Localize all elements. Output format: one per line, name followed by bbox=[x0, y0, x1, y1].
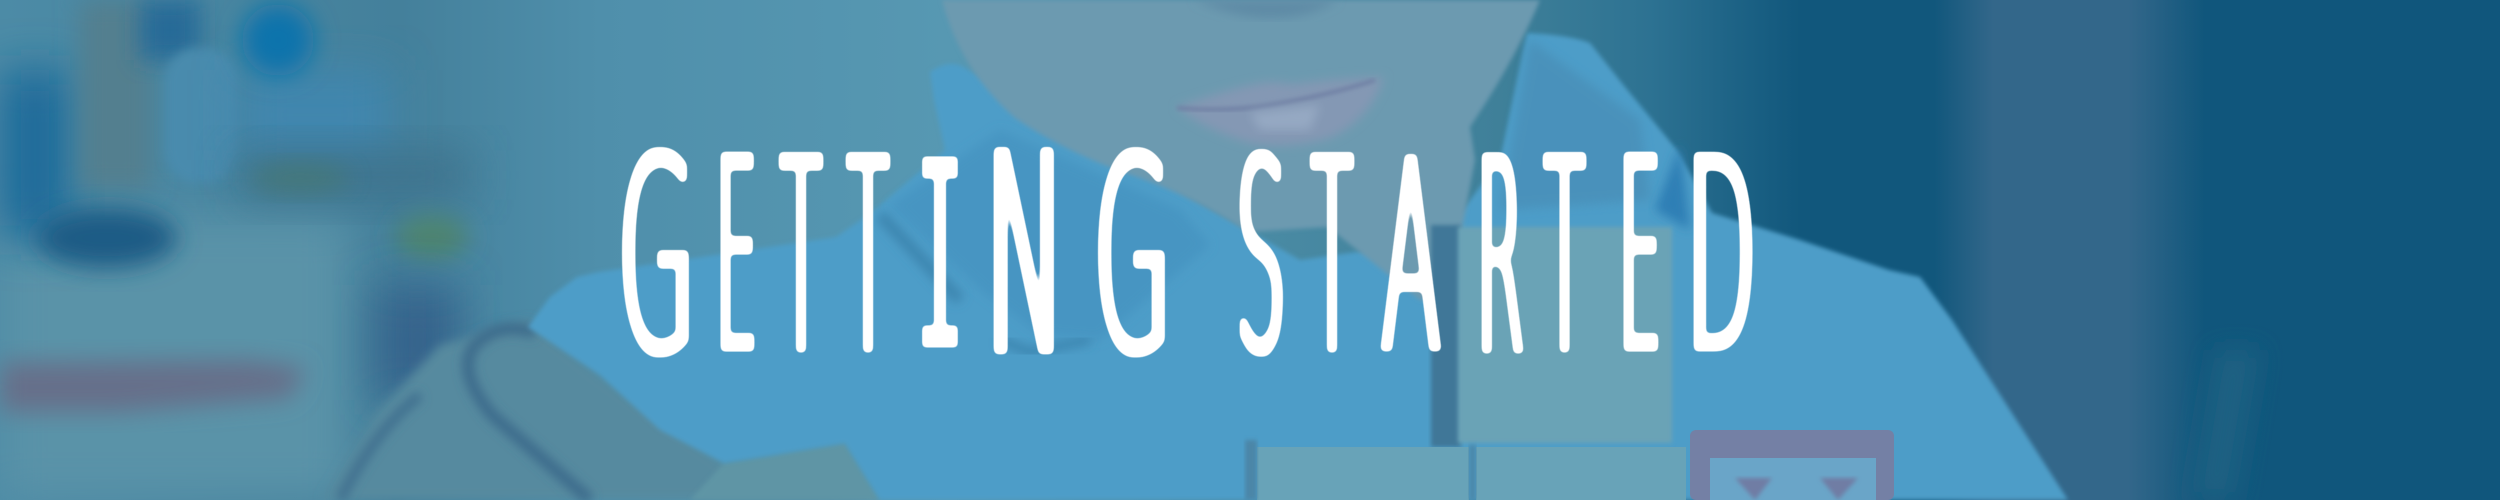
title: E bbox=[1619, 105, 1661, 411]
title: E bbox=[716, 104, 757, 411]
title: T bbox=[1545, 105, 1584, 412]
title: R bbox=[1477, 104, 1524, 413]
title: T bbox=[781, 104, 821, 412]
blurred toys left bbox=[0, 0, 470, 500]
held block bbox=[690, 443, 880, 500]
title: T bbox=[848, 104, 888, 412]
title: N bbox=[985, 98, 1066, 416]
wooden blocks bbox=[1245, 225, 1894, 500]
lighter column right bbox=[1934, 0, 2204, 500]
title: S bbox=[1236, 103, 1286, 411]
nose bbox=[1194, 0, 1338, 18]
title: I bbox=[917, 107, 963, 435]
title: G bbox=[618, 101, 695, 413]
title: A bbox=[1382, 106, 1440, 409]
face and neck bbox=[942, 0, 1540, 300]
title: D bbox=[1687, 105, 1756, 410]
lips bbox=[1177, 77, 1384, 146]
hand and finger bbox=[322, 320, 880, 500]
title: G bbox=[1094, 101, 1171, 413]
shirt bbox=[528, 33, 2068, 500]
faint post right bbox=[2190, 350, 2260, 500]
title: T bbox=[1312, 104, 1352, 412]
collar shading bbox=[880, 40, 1690, 352]
title bbox=[618, 98, 1756, 435]
